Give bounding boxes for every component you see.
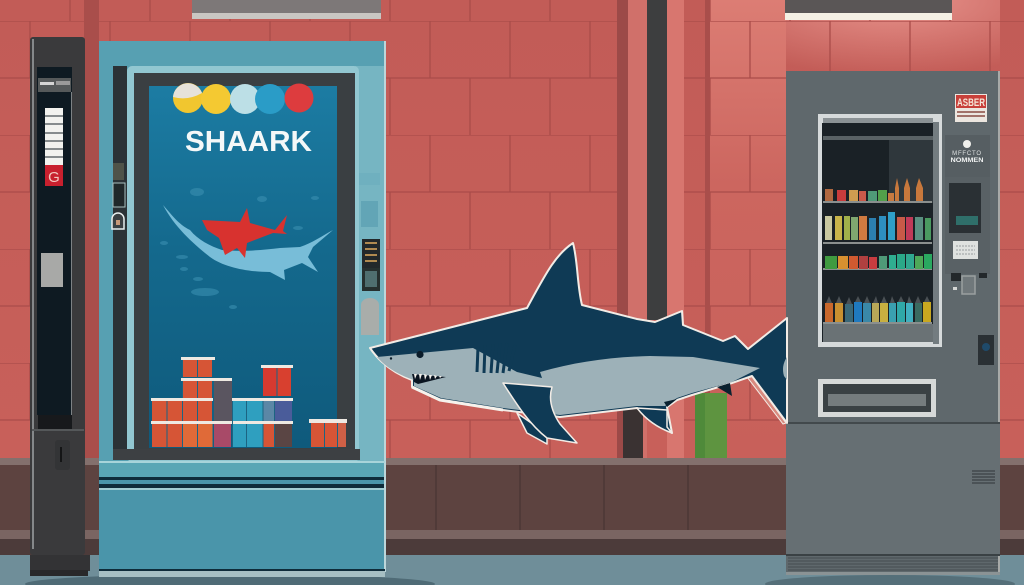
lower wall pole	[623, 405, 643, 460]
brand sticker	[955, 94, 987, 122]
rear fin	[637, 408, 672, 433]
brand plate: MFFCTO	[952, 151, 982, 157]
lower rear fin	[517, 413, 547, 444]
pale tail spot	[783, 357, 787, 380]
brick wall background	[0, 0, 1024, 460]
shelf 4 products	[825, 296, 931, 322]
brand plate	[945, 135, 990, 177]
indicator stripes	[45, 108, 63, 186]
dark wall column	[647, 0, 667, 320]
ceiling light right	[785, 0, 952, 20]
brand plate: NOMMEN	[950, 157, 984, 164]
shark body	[370, 243, 787, 433]
pectoral fin	[503, 383, 577, 443]
faint bubbles	[160, 188, 319, 309]
white belly edge	[412, 387, 503, 410]
side reader	[978, 335, 994, 365]
base stripes	[786, 554, 1000, 575]
pink tail sliver	[747, 376, 786, 424]
left control strip	[112, 163, 125, 229]
machine title: SHAARK	[185, 126, 312, 158]
green box	[695, 393, 727, 458]
shelf 3 products	[825, 254, 932, 269]
mouth and teeth	[412, 374, 446, 384]
brand sticker: ASBER	[957, 97, 985, 109]
right control panels	[359, 173, 380, 335]
stacked cans	[151, 357, 347, 447]
left kiosk	[30, 37, 90, 576]
indicator stripes: G	[48, 169, 60, 186]
gray label	[41, 253, 63, 287]
product window	[818, 114, 942, 347]
gray vending machine	[786, 71, 1000, 575]
teal vending machine	[99, 41, 386, 577]
gills	[477, 343, 515, 373]
pickup door	[818, 379, 936, 417]
shark belly	[377, 348, 760, 415]
pale blue shark illustration	[163, 205, 333, 280]
display screen	[149, 86, 337, 448]
ceiling light left	[192, 0, 381, 19]
vent	[972, 471, 995, 483]
eye	[390, 351, 424, 360]
big shark	[370, 243, 787, 444]
shelf 2 products	[825, 212, 931, 240]
small belly fins	[717, 383, 732, 396]
red shark illustration	[202, 208, 287, 258]
wainscot base	[0, 458, 1024, 556]
shelf 1 products	[825, 178, 923, 201]
payment panel	[945, 177, 990, 294]
floor	[0, 555, 1024, 585]
color balls	[173, 83, 314, 114]
